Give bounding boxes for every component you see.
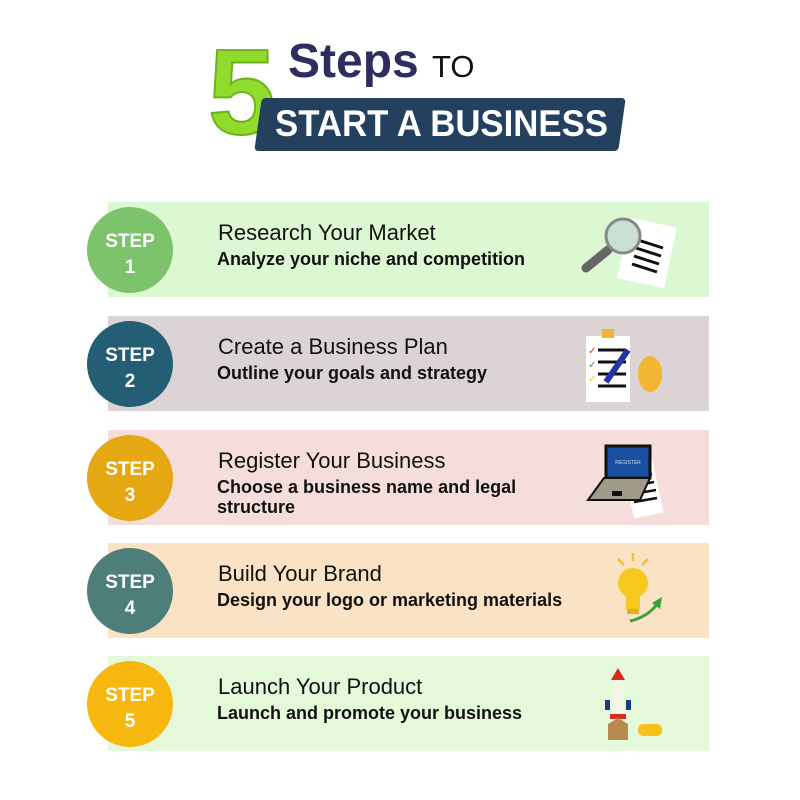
step 3 badge: 3 bbox=[125, 485, 135, 506]
step 4 badge bbox=[87, 548, 173, 634]
step 4 badge: STEP bbox=[105, 572, 155, 593]
step 1 badge: STEP bbox=[105, 231, 155, 252]
step 2 title: Create a Business Plan bbox=[218, 334, 448, 359]
icon: checklist and bulb: ✓ bbox=[588, 360, 596, 371]
icon: rocket and coins bbox=[605, 668, 662, 740]
step 3 title: Register Your Business bbox=[218, 448, 445, 473]
panel: step 3 bbox=[108, 430, 709, 525]
step 5 badge: 5 bbox=[125, 711, 135, 732]
step 2 badge: 2 bbox=[125, 371, 135, 392]
step 5 badge bbox=[87, 661, 173, 747]
heading: Steps to: Steps TO bbox=[288, 35, 475, 88]
step 2 badge bbox=[87, 321, 173, 407]
panel: step 5 bbox=[108, 656, 709, 751]
step 5 badge: STEP bbox=[105, 685, 155, 706]
banner: start a business bbox=[254, 98, 626, 151]
title: START A BUSINESS bbox=[275, 103, 608, 144]
panel: step 2 bbox=[108, 316, 709, 411]
step 2 description: Outline your goals and strategy bbox=[217, 363, 487, 383]
step 1 description: Analyze your niche and competition bbox=[217, 249, 525, 269]
title bbox=[208, 24, 626, 160]
step 4 description: Design your logo or marketing materials bbox=[217, 590, 562, 610]
step 3 description: Choose a business name and legal bbox=[217, 477, 516, 497]
icon: laptop register bbox=[586, 444, 664, 518]
icon: checklist and bulb: ✓ bbox=[588, 374, 596, 385]
step 5 description: Launch and promote your business bbox=[217, 703, 522, 723]
icon: laptop register: REGISTER bbox=[615, 460, 641, 466]
step 2 badge: STEP bbox=[105, 345, 155, 366]
step 4 title: Build Your Brand bbox=[218, 561, 382, 586]
panel: step 1 bbox=[108, 202, 709, 297]
icon: checklist and bulb: ✓ bbox=[588, 346, 596, 357]
step 1 badge bbox=[87, 207, 173, 293]
step 3 badge: STEP bbox=[105, 459, 155, 480]
icon: checklist and bulb bbox=[586, 329, 662, 402]
icon: magnifier and document bbox=[582, 218, 677, 288]
step 5 title: Launch Your Product bbox=[218, 674, 422, 699]
step 4 badge: 4 bbox=[125, 598, 135, 619]
panel: step 4 bbox=[108, 543, 709, 638]
icon: light bulb with arrow bbox=[617, 553, 662, 622]
big number 5: 5 bbox=[208, 24, 276, 160]
step 1 badge: 1 bbox=[125, 257, 135, 278]
step 3 description: structure bbox=[217, 497, 295, 517]
step 3 description bbox=[217, 477, 516, 517]
step 3 badge bbox=[87, 435, 173, 521]
step 1 title: Research Your Market bbox=[218, 220, 436, 245]
